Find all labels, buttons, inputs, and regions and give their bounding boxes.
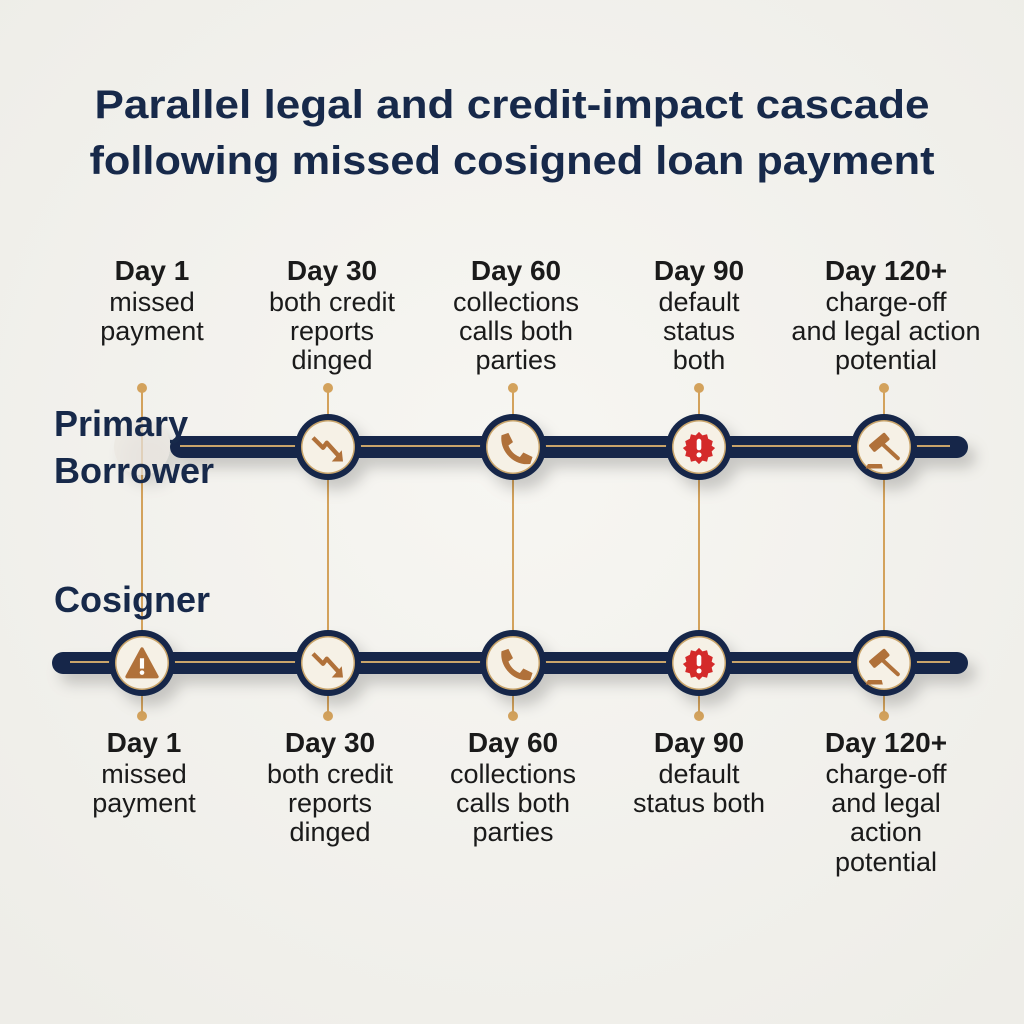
connector lines between tracks: [137, 383, 889, 721]
bottom day labels: Day 1: [107, 727, 181, 758]
icons bottom: [127, 648, 898, 685]
label: cosigner: Cosigner: [54, 579, 210, 620]
bottom day labels: reports: [288, 788, 372, 818]
top day labels: Day 90: [654, 255, 744, 286]
top day labels: default: [658, 287, 740, 317]
bottom day labels: Day 120+: [825, 727, 947, 758]
label: primary borrower: Primary: [54, 403, 188, 444]
bottom day labels: [92, 727, 947, 877]
top day labels: calls both: [459, 316, 573, 346]
label: primary borrower: Borrower: [54, 450, 214, 491]
bottom day labels: status both: [633, 788, 765, 818]
bottom day labels: calls both: [456, 788, 570, 818]
top day labels: reports: [290, 316, 374, 346]
icons top: [313, 432, 898, 469]
top day labels: payment: [100, 316, 204, 346]
label: primary borrower: [54, 403, 214, 491]
title: Parallel legal and credit-impact cascade: [94, 83, 930, 127]
top day labels: collections: [453, 287, 579, 317]
top day labels: and legal action: [791, 316, 981, 346]
top day labels: dinged: [291, 345, 373, 375]
bottom day labels: Day 90: [654, 727, 744, 758]
bottom day labels: dinged: [289, 817, 371, 847]
bottom day labels: potential: [835, 847, 937, 877]
top track: primary borrower: [114, 414, 968, 480]
top day labels: both: [673, 345, 725, 375]
bottom day labels: missed: [101, 759, 187, 789]
bottom day labels: collections: [450, 759, 576, 789]
top day labels: both credit: [269, 287, 396, 317]
bottom day labels: charge-off: [825, 759, 947, 789]
top day labels: status: [663, 316, 735, 346]
bottom day labels: both credit: [267, 759, 394, 789]
top day labels: Day 60: [471, 255, 561, 286]
top day labels: charge-off: [825, 287, 947, 317]
top day labels: Day 120+: [825, 255, 947, 286]
top day labels: parties: [475, 345, 557, 375]
bottom track: cosigner: [52, 630, 968, 696]
top day labels: Day 1: [115, 255, 189, 286]
bottom day labels: and legal: [831, 788, 941, 818]
bottom day labels: parties: [472, 817, 554, 847]
bottom day labels: default: [658, 759, 740, 789]
title: [90, 83, 935, 183]
title: following missed cosigned loan payment: [90, 139, 935, 183]
bottom day labels: payment: [92, 788, 196, 818]
top day labels: Day 30: [287, 255, 377, 286]
top day labels: missed: [109, 287, 195, 317]
bottom day labels: Day 60: [468, 727, 558, 758]
top day labels: potential: [835, 345, 937, 375]
bottom day labels: Day 30: [285, 727, 375, 758]
top day labels: [100, 255, 981, 375]
bottom day labels: action: [850, 817, 922, 847]
